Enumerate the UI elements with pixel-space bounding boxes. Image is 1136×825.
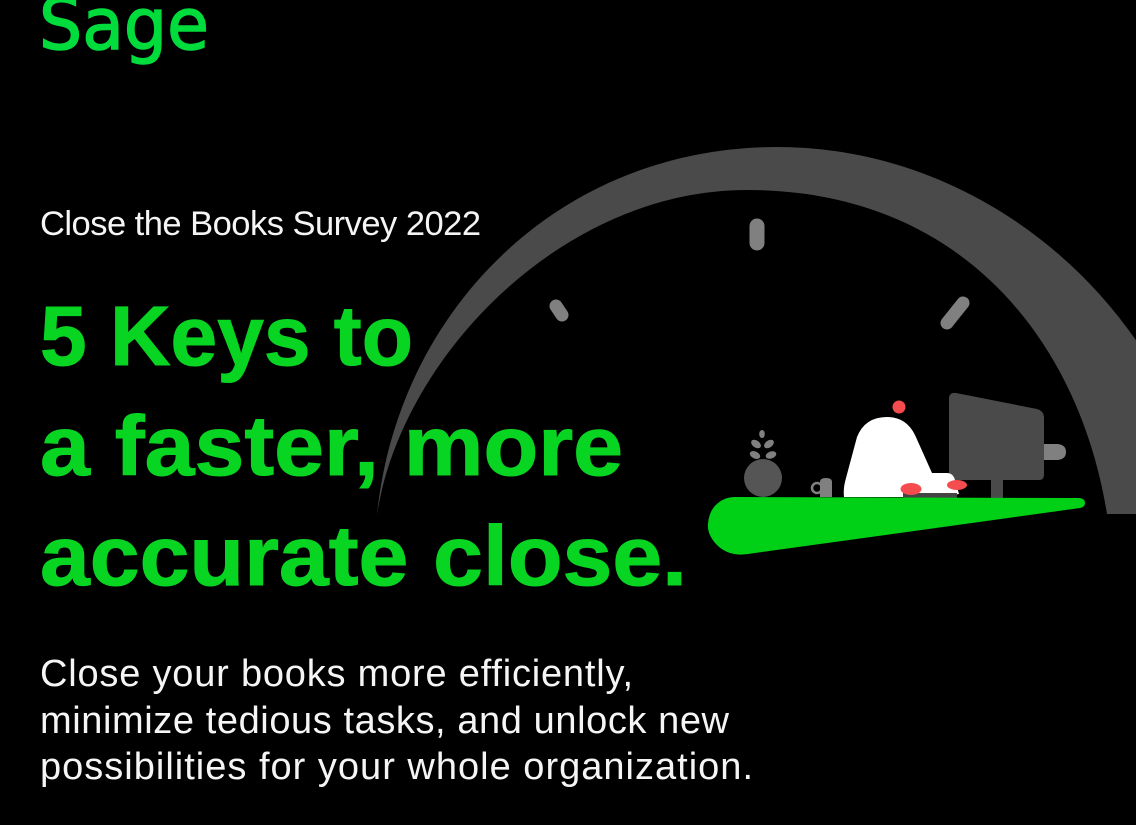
mug — [812, 478, 832, 497]
monitor — [949, 393, 1066, 498]
desk — [708, 497, 1085, 555]
intro paragraph: possibilities for your whole organization. — [40, 746, 753, 788]
headline: a faster, more — [40, 399, 623, 493]
headline: 5 Keys to — [40, 289, 413, 383]
plant — [744, 430, 782, 497]
intro paragraph: minimize tedious tasks, and unlock new — [40, 700, 730, 742]
person — [844, 400, 967, 498]
intro paragraph — [40, 653, 753, 788]
headline: accurate close. — [40, 509, 687, 603]
survey label: Close the Books Survey 2022 — [40, 205, 481, 243]
intro paragraph: Close your books more efficiently, — [40, 653, 633, 695]
headline — [40, 289, 687, 603]
gauge arc — [377, 147, 1136, 515]
gauge ticks — [556, 226, 963, 323]
illustration: person at desk — [708, 393, 1085, 555]
